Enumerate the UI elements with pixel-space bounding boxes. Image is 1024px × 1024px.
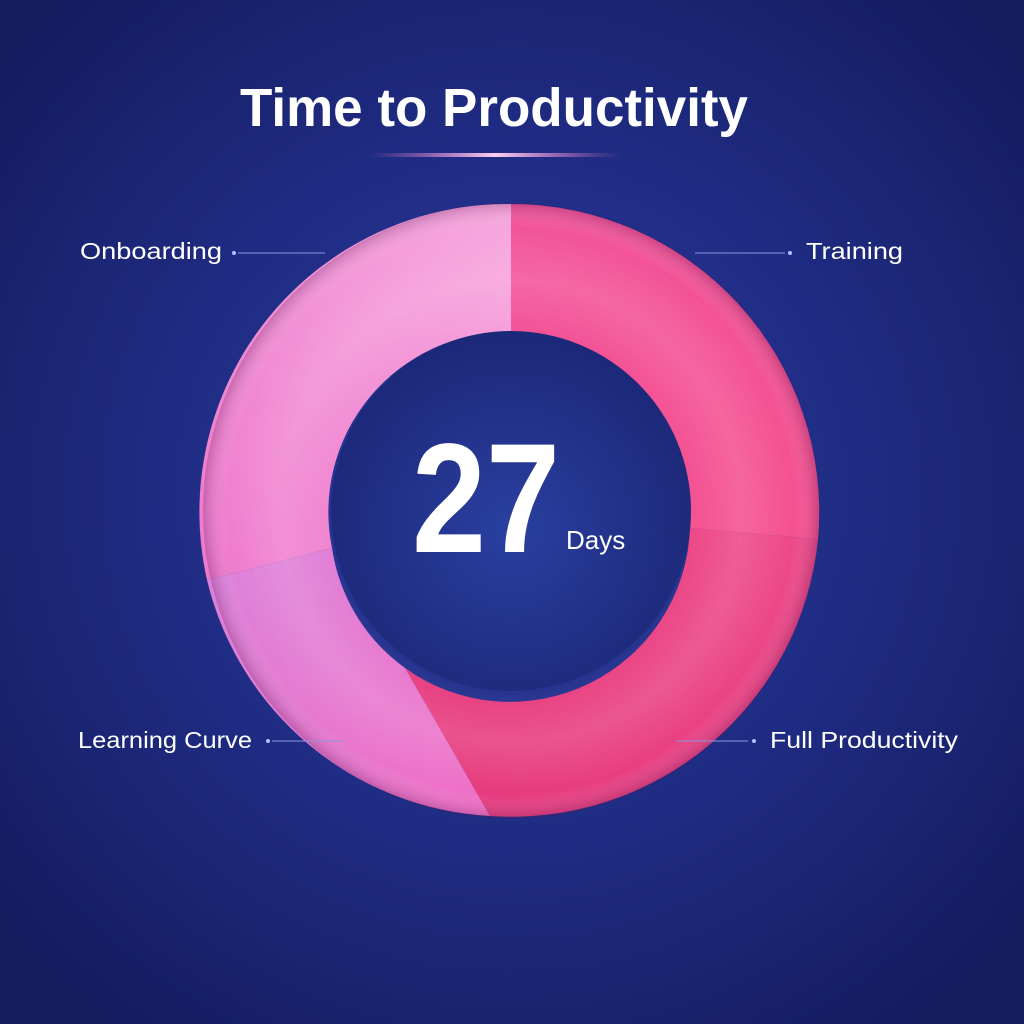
inner hole xyxy=(331,331,691,691)
label: learning curve: Learning Curve xyxy=(78,727,252,753)
segment: learning curve (bottom left) xyxy=(207,548,490,816)
donut chart xyxy=(199,203,819,819)
label: learning curve xyxy=(78,727,345,753)
label: training xyxy=(695,238,903,264)
ring shine xyxy=(203,203,819,819)
center value: Days xyxy=(566,525,625,555)
label: full productivity xyxy=(676,727,959,753)
segment: training (top right) xyxy=(511,204,819,539)
segment: onboarding (top left) xyxy=(199,204,511,580)
title: Time to Productivity xyxy=(240,78,748,138)
center value: 27 xyxy=(412,412,560,586)
label: onboarding: Onboarding xyxy=(80,238,222,264)
segment: full productivity (bottom right) xyxy=(405,528,818,817)
label: training: Training xyxy=(806,238,903,264)
label: full productivity: Full Productivity xyxy=(770,727,959,753)
label: onboarding xyxy=(80,238,325,264)
